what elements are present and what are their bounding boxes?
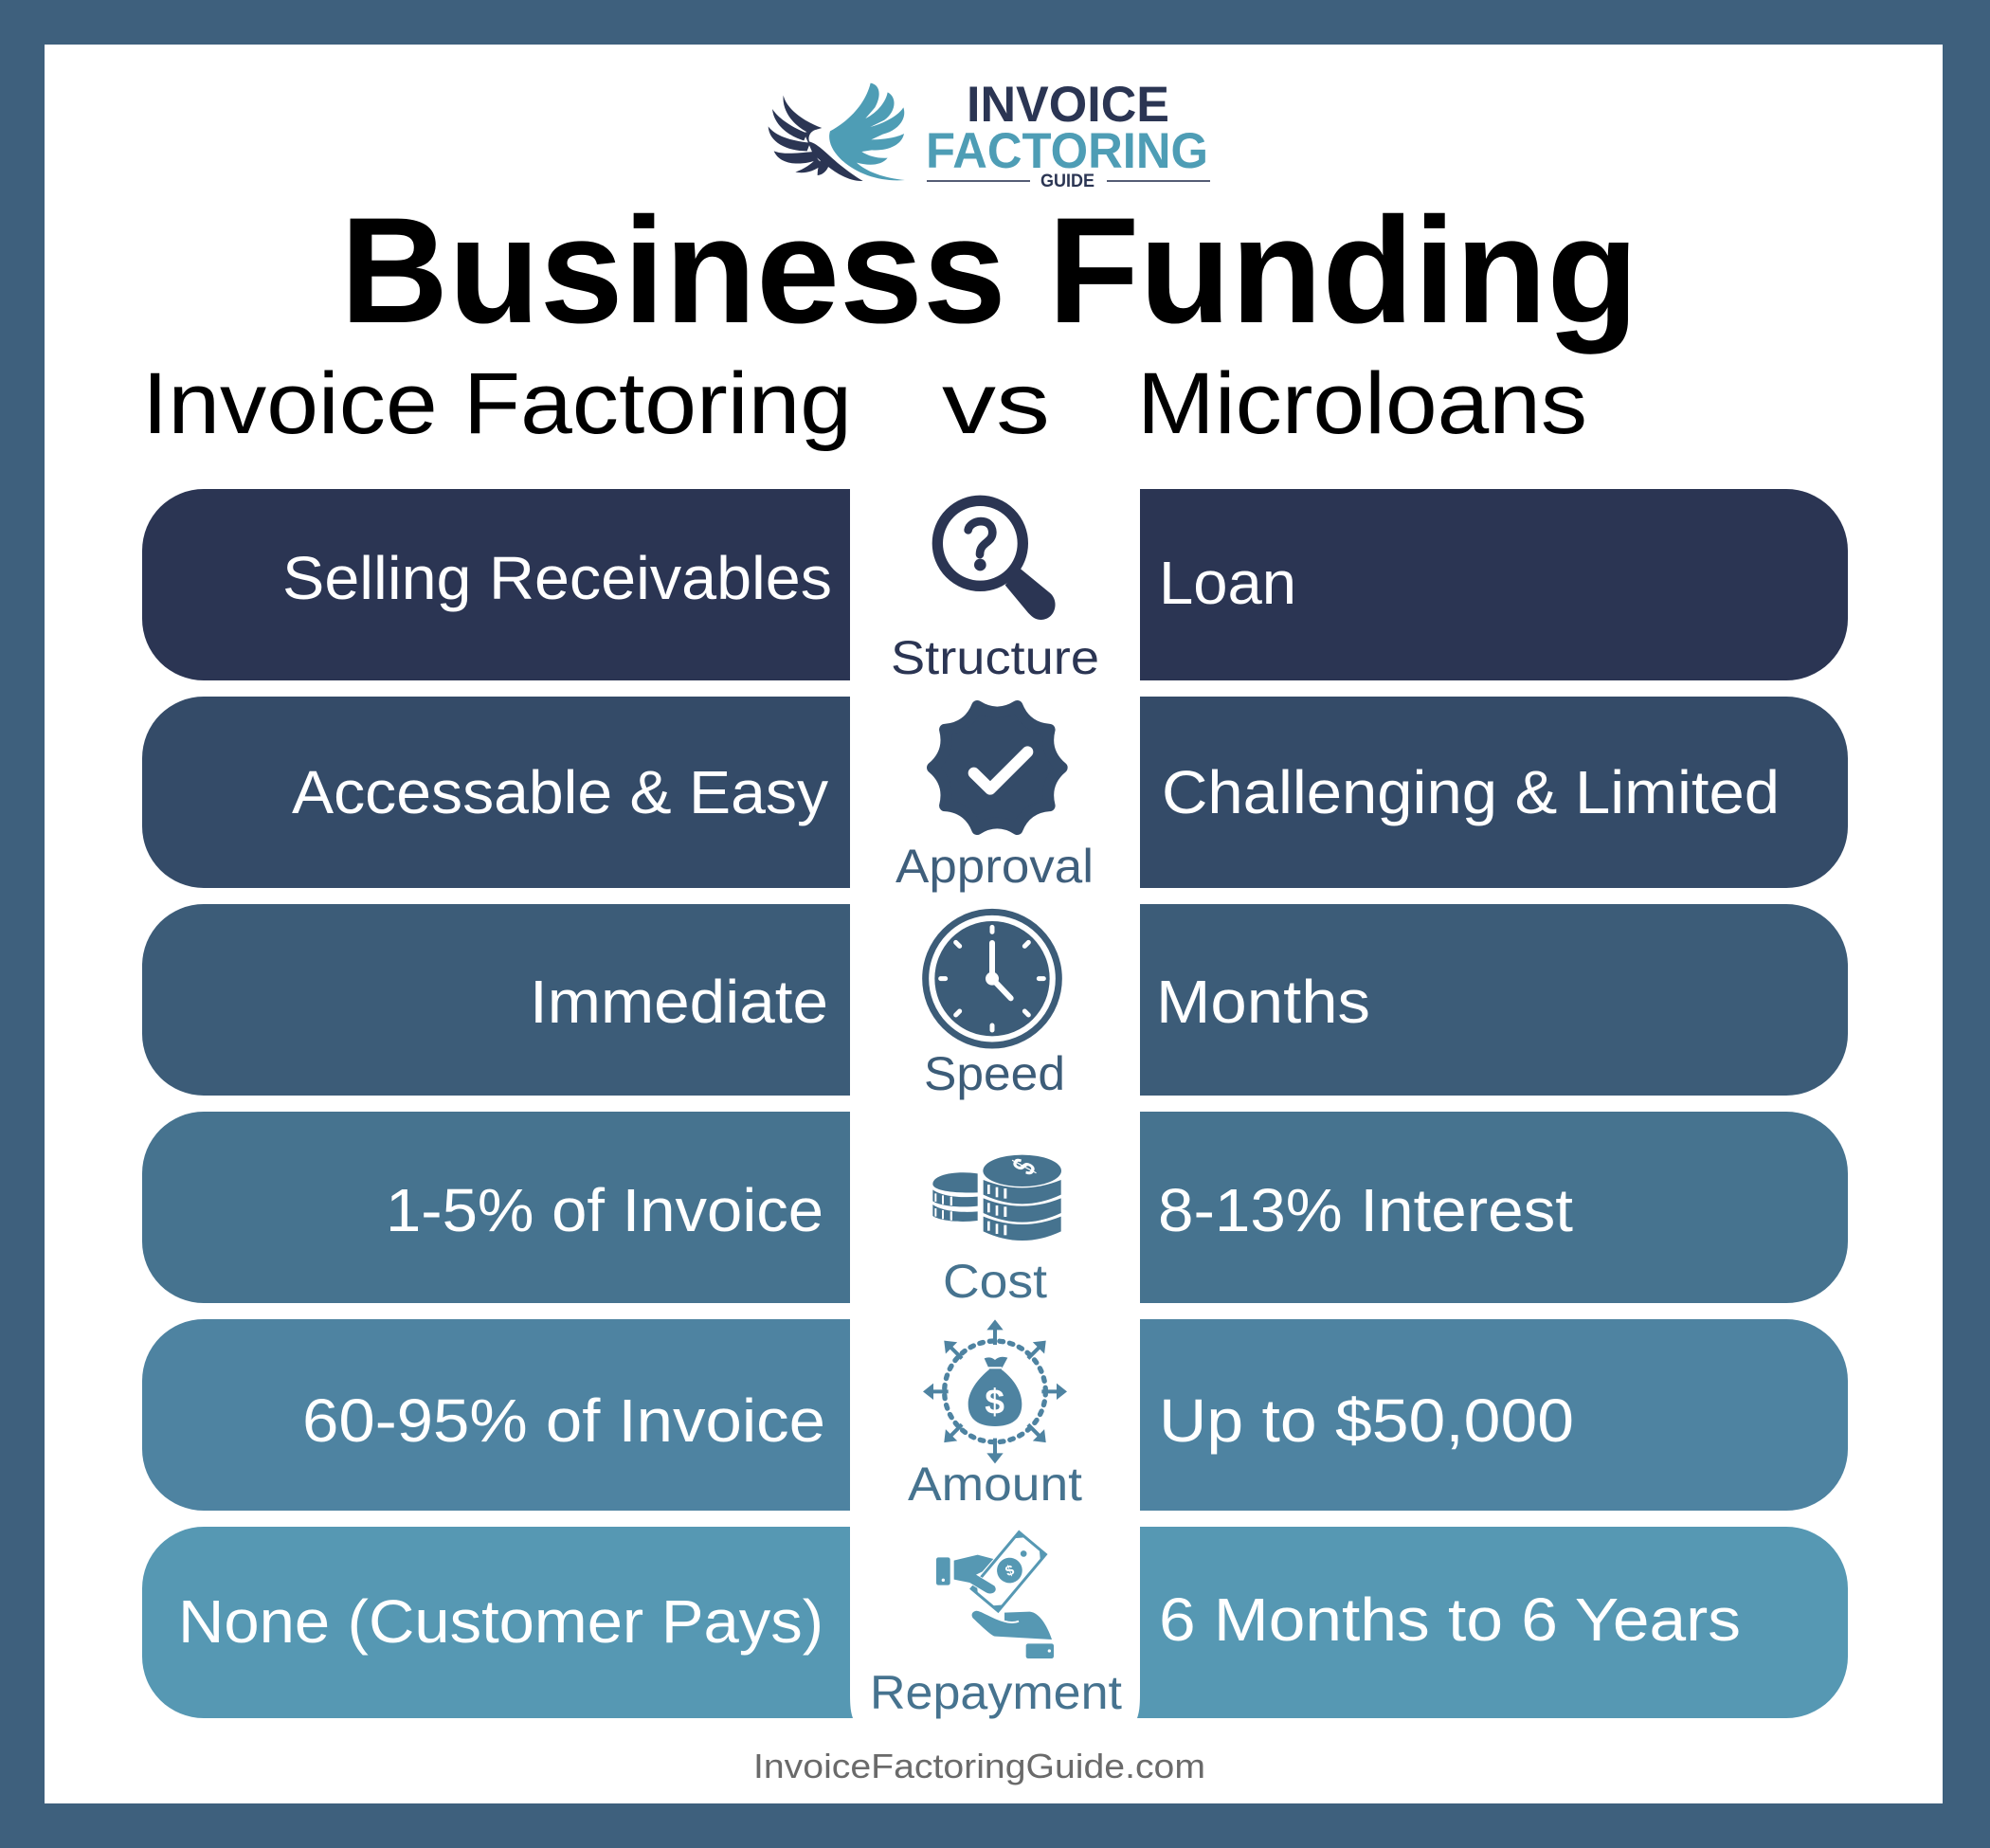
left bar: cost: [142, 1112, 850, 1303]
left text: speed: Immediate: [530, 968, 828, 1036]
left bar: structure: [142, 489, 850, 680]
right bar: speed: [1140, 904, 1848, 1096]
right bar: cost: [1140, 1112, 1848, 1303]
icon: hands exchanging money: [936, 1532, 1054, 1658]
right text: approval: Challenging & Limited: [1162, 758, 1780, 826]
label: repayment: Repayment: [870, 1666, 1122, 1719]
heading: microloans: Microloans: [1137, 355, 1587, 452]
icon: magnifier with question mark: [937, 500, 1056, 620]
icon: money bag with arrows: [923, 1319, 1067, 1463]
logo wordmark: guide: GUIDE: [1040, 172, 1094, 191]
panel: cost row: [142, 1112, 1848, 1308]
label: amount: Amount: [908, 1458, 1082, 1511]
left text: amount: 60-95% of Invoice: [302, 1386, 825, 1455]
panel: approval row: [142, 697, 1848, 893]
icon: coin stacks: $: [1006, 1153, 1043, 1181]
label: cost: Cost: [943, 1255, 1047, 1308]
icon: clock: [926, 912, 1058, 1045]
right text: cost: 8-13% Interest: [1158, 1176, 1573, 1244]
panel: structure row: [142, 489, 1848, 684]
heading: invoice factoring: Invoice Factoring: [142, 355, 852, 452]
logo wordmark: invoice: INVOICE: [967, 77, 1169, 133]
left text: approval: Accessable & Easy: [292, 758, 828, 826]
panel: speed row: [142, 904, 1848, 1100]
left text: structure: Selling Receivables: [282, 544, 832, 612]
icon: coin stacks: [932, 1153, 1061, 1241]
right bar: repayment: [1137, 1527, 1848, 1718]
logo: [769, 77, 1210, 191]
icon: money bag with arrows: $: [985, 1381, 1004, 1421]
label: structure: Structure: [891, 631, 1099, 684]
icon: hands exchanging money: $: [1004, 1562, 1017, 1580]
left bar: speed: [142, 904, 850, 1096]
right text: repayment: 6 Months to 6 Years: [1159, 1585, 1741, 1654]
footer website: InvoiceFactoringGuide.com: [753, 1747, 1205, 1785]
title: Business Funding: [340, 186, 1638, 354]
right text: amount: Up to $50,000: [1159, 1386, 1574, 1455]
label: approval: Approval: [896, 840, 1094, 893]
icon: check badge: [932, 706, 1062, 829]
right bar: amount: [1140, 1319, 1848, 1511]
left text: repayment: None (Customer Pays): [178, 1587, 823, 1656]
label: speed: Speed: [924, 1047, 1065, 1100]
right text: structure: Loan: [1159, 549, 1296, 617]
left bar: approval: [142, 697, 850, 888]
left bar: repayment: [142, 1527, 853, 1718]
panel: repayment row: [142, 1527, 1848, 1719]
heading: vs: vs: [942, 355, 1050, 452]
right text: speed: Months: [1156, 968, 1370, 1036]
panel: amount row: [142, 1319, 1848, 1511]
right bar: structure: [1140, 489, 1848, 680]
left bar: amount: [142, 1319, 850, 1511]
icon: eagle: [769, 83, 905, 181]
right bar: approval: [1140, 697, 1848, 888]
logo wordmark: factoring: FACTORING: [926, 123, 1208, 179]
left text: cost: 1-5% of Invoice: [386, 1176, 823, 1244]
